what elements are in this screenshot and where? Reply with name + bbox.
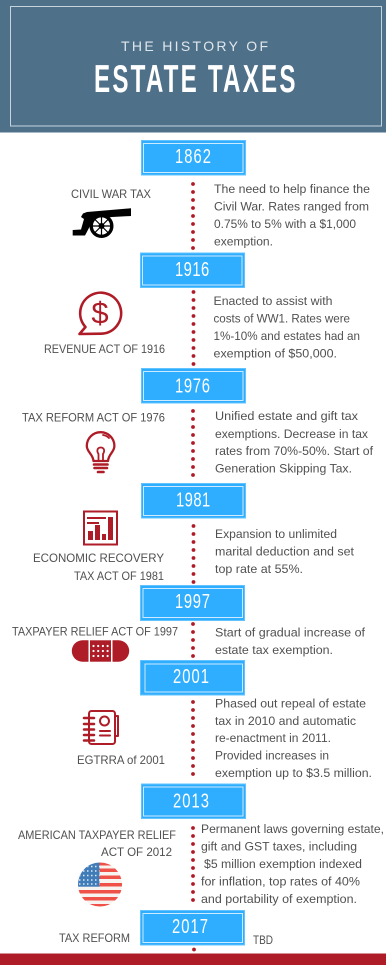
description: for inflation, top rates of 40% — [201, 874, 360, 888]
description: exemption up to $3.5 million. — [215, 766, 372, 780]
label: american taxpayer relief act of 2012: AMERICAN TAXPAYER RELIEF — [18, 828, 176, 842]
icon: cannon — [73, 208, 131, 236]
description: Expansion to unlimited — [215, 527, 337, 541]
description: tax in 2010 and automatic — [215, 714, 356, 728]
description: Provided increases in — [215, 748, 329, 762]
description: The need to help finance the — [214, 182, 370, 196]
icon: dollar speech bubble — [80, 293, 121, 334]
dotted timeline — [191, 700, 195, 776]
label: american taxpayer relief act of 2012: ACT OF 2012 — [101, 845, 172, 859]
icon: dollar speech bubble: $ — [91, 296, 109, 330]
description: 1%-10% and estates had an — [214, 329, 360, 343]
description: top rate at 55%. — [215, 562, 303, 576]
year badge 1916 — [140, 253, 244, 288]
icon: light bulb — [87, 432, 114, 472]
description: $5 million exemption indexed — [204, 857, 362, 871]
description: Phased out repeal of estate — [215, 696, 366, 710]
section: 1862 — [71, 140, 370, 250]
label: economic recovery tax act of 1981 — [33, 551, 164, 583]
dotted timeline — [191, 409, 195, 477]
description — [215, 626, 366, 657]
label: tax reform: TAX REFORM — [59, 931, 130, 945]
dotted timeline — [191, 622, 195, 658]
description: costs of WW1. Rates were — [214, 312, 350, 326]
year badge 1916: 1916 — [175, 258, 209, 281]
title: the history of: THE HISTORY OF — [121, 38, 268, 54]
description: and portability of exemption. — [201, 892, 357, 906]
description — [215, 527, 355, 576]
label: taxpayer relief act of 1997: TAXPAYER RELIEF ACT OF 1997 — [12, 624, 178, 638]
year badge 2013 — [142, 784, 246, 818]
section: 2013 — [18, 784, 384, 907]
section: 1981 — [33, 484, 355, 584]
dotted timeline — [191, 826, 195, 902]
section: 1916 — [44, 253, 360, 366]
icon: american flag — [78, 862, 122, 907]
dotted timeline — [192, 290, 195, 366]
label: economic recovery tax act of 1981: TAX ACT OF 1981 — [74, 569, 164, 583]
description — [201, 822, 384, 906]
icon: bandage — [72, 640, 129, 662]
label: revenue act of 1916: REVENUE ACT OF 1916 — [44, 342, 165, 356]
description: estate tax exemption. — [215, 643, 333, 657]
header banner — [0, 0, 386, 132]
section: 2017 — [59, 910, 273, 951]
year badge 1976: 1976 — [175, 374, 210, 397]
description: Start of gradual increase of — [215, 626, 366, 640]
description — [215, 696, 372, 780]
description — [215, 409, 374, 476]
title: estate taxes: ESTATE TAXES — [94, 57, 296, 100]
label: american taxpayer relief act of 2012 — [18, 828, 176, 859]
icon: address notebook — [84, 711, 118, 744]
section: 1976 — [22, 368, 374, 477]
description — [214, 294, 360, 360]
section: 2001 — [77, 660, 372, 780]
dotted timeline — [192, 524, 195, 584]
label: civil war tax: CIVIL WAR TAX — [71, 187, 151, 201]
description: marital deduction and set — [215, 544, 355, 558]
description: Unified estate and gift tax — [215, 409, 359, 423]
year badge 1997 — [140, 586, 244, 620]
dotted timeline — [191, 182, 195, 250]
year badge 2017 — [140, 910, 244, 945]
label: economic recovery tax act of 1981: ECONOMIC RECOVERY — [33, 551, 164, 565]
year badge 2001 — [140, 660, 244, 695]
description: 0.75% to 5% with a $1,000 — [214, 217, 356, 231]
year badge 2017: 2017 — [172, 915, 208, 938]
description: tbd: TBD — [253, 933, 273, 947]
year badge 1976 — [142, 368, 246, 403]
footer bar — [0, 954, 386, 965]
year badge 1862 — [142, 140, 246, 175]
year badge 1862: 1862 — [175, 145, 211, 168]
label: egtrra of 2001: EGTRRA of 2001 — [77, 753, 165, 767]
description: Permanent laws governing estate, — [201, 822, 384, 836]
description — [214, 182, 370, 248]
description: exemption of $50,000. — [214, 346, 337, 360]
description: gift and GST taxes, including — [201, 840, 357, 854]
section: 1997 — [12, 586, 366, 662]
description: Civil War. Rates ranged from — [214, 200, 369, 214]
description: Enacted to assist with — [214, 294, 333, 308]
description: re-enactment in 2011. — [215, 731, 331, 745]
year badge 2001: 2001 — [173, 665, 209, 688]
year badge 1981: 1981 — [176, 488, 210, 511]
description: exemption. — [214, 234, 273, 248]
label: tax reform act of 1976: TAX REFORM ACT OF 1976 — [22, 410, 165, 424]
description: Generation Skipping Tax. — [215, 462, 352, 476]
timeline dot — [192, 948, 196, 951]
year badge 2013: 2013 — [173, 789, 209, 812]
description: rates from 70%-50%. Start of — [215, 444, 374, 458]
year badge 1997: 1997 — [175, 590, 210, 613]
icon: bar chart report — [84, 512, 117, 544]
description: exemptions. Decrease in tax — [215, 427, 369, 441]
year badge 1981 — [142, 484, 246, 518]
